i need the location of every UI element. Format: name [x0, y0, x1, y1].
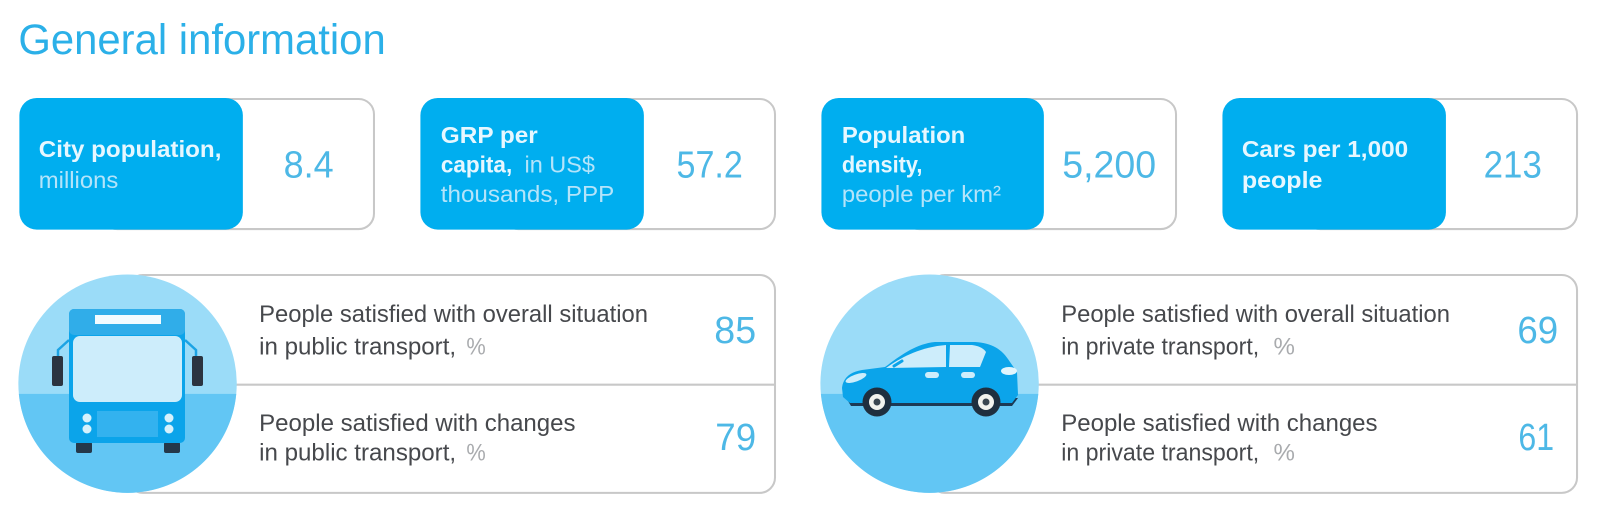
text: satisfied changes private: %: [1273, 440, 1295, 467]
icon: car in circle: [820, 274, 1039, 493]
value: 8.4: 8.4: [284, 144, 334, 186]
label: city population, millions: City population,: [39, 136, 221, 162]
value: 57.2: 57.2: [677, 144, 743, 186]
text: satisfied overall private: [1061, 301, 1450, 361]
label: population density, people per km2: [842, 122, 1001, 207]
text: satisfied overall public: [259, 301, 648, 361]
value: 5,200: 5,200: [1062, 144, 1156, 186]
icon: bus in circle: [18, 274, 237, 493]
text: satisfied changes public: People satisfied with changes: [259, 410, 576, 437]
text: satisfied changes public: [259, 410, 576, 467]
panel: GRP per capita: [420, 98, 775, 230]
text: satisfied overall public: %: [466, 334, 486, 361]
value: 213: 213: [1484, 144, 1542, 186]
text: satisfied changes private: in private transport,: [1061, 440, 1259, 467]
label: population density, people per km2: density,: [842, 151, 922, 177]
panel: city population: [19, 98, 374, 230]
label: GRP per capita, in US$ thousands, PPP: in US$: [524, 151, 595, 177]
text: satisfied overall private: %: [1273, 334, 1295, 361]
text: satisfied changes public: %: [466, 440, 486, 467]
text: satisfied overall private: People satisfied with overall situation: [1061, 301, 1450, 328]
text: satisfied changes public: in public transport,: [259, 440, 456, 467]
text: satisfied changes private: [1061, 410, 1378, 467]
panel: cars per 1,000 people: [1222, 98, 1577, 230]
text: satisfied overall public: in public transport,: [259, 334, 456, 361]
text: satisfied overall public: People satisfied with overall situation: [259, 301, 648, 328]
panel: population density: [821, 98, 1176, 230]
label: city population, millions: [39, 136, 221, 193]
label: cars per 1,000 people: people: [1242, 167, 1322, 193]
panel: public transport satisfaction: [18, 274, 775, 493]
panel: private transport satisfaction: [820, 274, 1577, 493]
label: population density, people per km2: Population: [842, 122, 965, 148]
text: satisfied changes private: People satisfied with changes: [1061, 410, 1378, 437]
label: GRP per capita, in US$ thousands, PPP: thousands, PPP: [441, 181, 614, 207]
value: 85: 85: [714, 309, 756, 351]
label: GRP per capita, in US$ thousands, PPP: GRP per: [441, 122, 538, 148]
text: satisfied overall private: in private transport,: [1061, 334, 1259, 361]
label: GRP per capita, in US$ thousands, PPP: capita,: [441, 151, 512, 177]
value: 61: 61: [1518, 416, 1554, 458]
label: cars per 1,000 people: Cars per 1,000: [1242, 136, 1408, 162]
label: city population, millions: millions: [39, 167, 118, 193]
label: cars per 1,000 people: [1242, 136, 1408, 193]
label: GRP per capita, in US$ thousands, PPP: [441, 122, 614, 207]
title: General information: [18, 16, 386, 64]
value: 79: 79: [715, 416, 756, 458]
label: population density, people per km2: people per km²: [842, 181, 1001, 207]
value: 69: 69: [1517, 309, 1558, 351]
